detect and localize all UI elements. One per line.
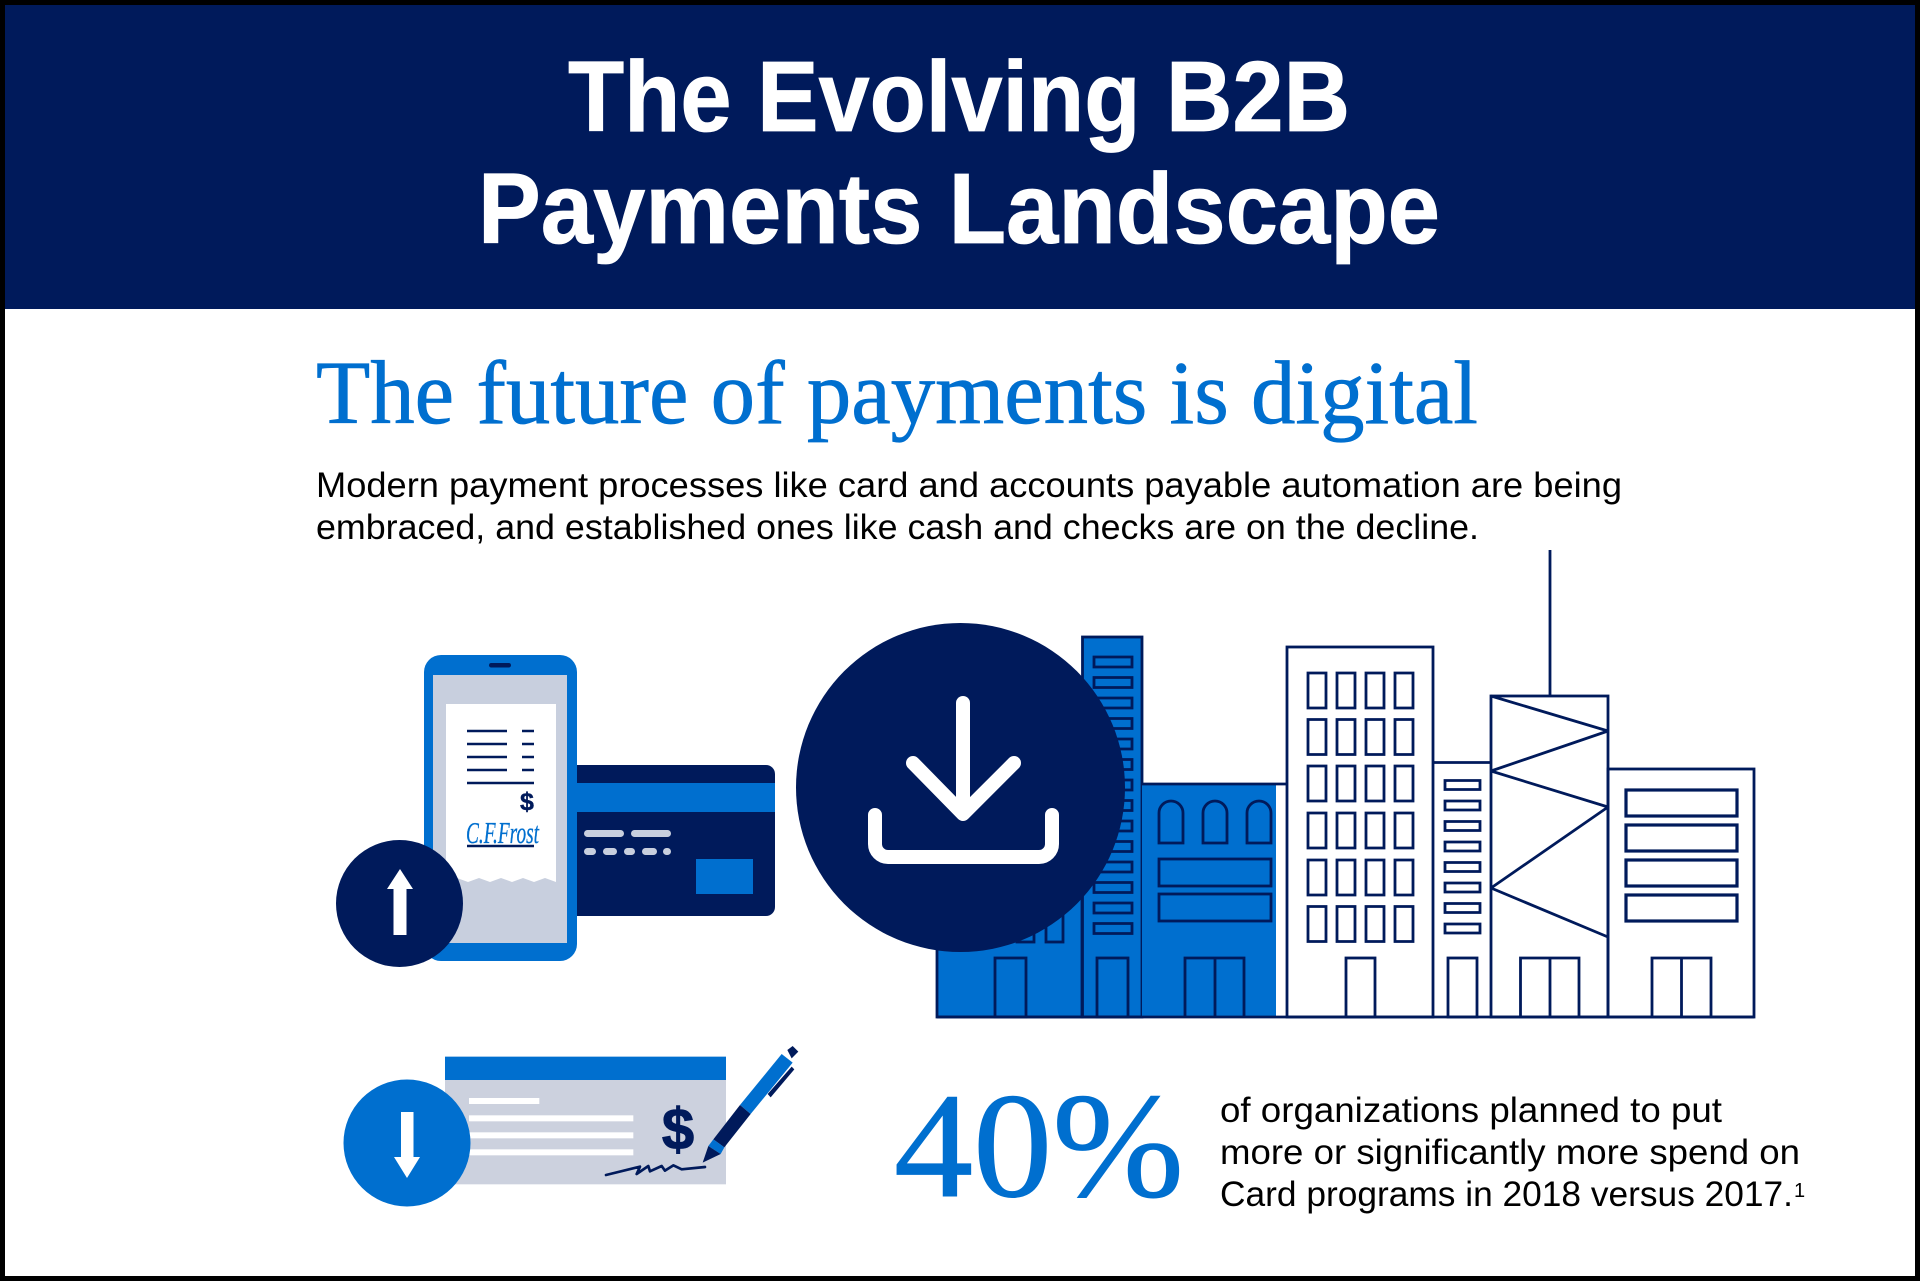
statistic description bbox=[1220, 1091, 1805, 1214]
statistic: 40%: 40% bbox=[894, 1063, 1184, 1229]
header band bbox=[0, 0, 1920, 309]
section heading: The future of payments is digital bbox=[316, 344, 1478, 443]
icon: phone with receipt: $ bbox=[520, 788, 534, 816]
intro paragraph: Modern payment processes like card and accounts payable automation are being bbox=[316, 466, 1622, 505]
blue building: arched bbox=[1142, 784, 1287, 1017]
outline building: antenna tower bbox=[1491, 550, 1608, 1017]
icon: cheque bbox=[445, 1057, 726, 1184]
statistic description: of organizations planned to put bbox=[1220, 1091, 1722, 1130]
city skyline bbox=[937, 550, 1754, 1017]
outline building: narrow bbox=[1433, 762, 1491, 1017]
title bbox=[478, 41, 1440, 265]
statistic description: Card programs in 2018 versus 2017. bbox=[1220, 1175, 1793, 1214]
intro paragraph bbox=[316, 466, 1622, 547]
icon: phone with receipt bbox=[424, 655, 577, 961]
title: Payments Landscape bbox=[478, 153, 1440, 265]
icon: cheque: $ bbox=[662, 1098, 694, 1162]
icon: pen bbox=[703, 1046, 798, 1163]
icon: down arrow circle bbox=[344, 1080, 470, 1206]
icon: download circle bbox=[796, 623, 1125, 952]
blue building: tower bbox=[1082, 637, 1142, 1017]
statistic description: 1 bbox=[1794, 1180, 1805, 1202]
blue building: left bbox=[937, 800, 1082, 1017]
icon: credit card bbox=[560, 765, 775, 916]
icon: phone with receipt: C.F.Frost bbox=[466, 815, 540, 850]
intro paragraph: embraced, and established ones like cash and checks are on the decline. bbox=[316, 508, 1479, 547]
statistic description: more or significantly more spend on bbox=[1220, 1133, 1800, 1172]
icon: up arrow circle bbox=[336, 840, 463, 967]
outline building: right bbox=[1608, 769, 1754, 1017]
title: The Evolving B2B bbox=[568, 41, 1350, 153]
outline building: grid windows bbox=[1287, 647, 1433, 1017]
